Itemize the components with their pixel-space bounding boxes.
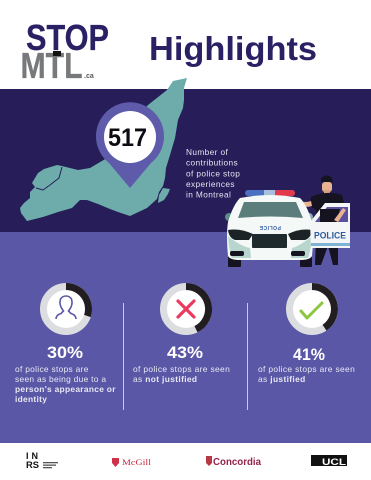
chart: donut 30% — [44, 286, 89, 332]
illustration: open police door — [310, 203, 350, 248]
title: Highlights — [149, 30, 317, 67]
illustration: open police door: POLICE — [314, 230, 346, 242]
icon: red cross — [178, 301, 194, 317]
map: island of Montreal — [20, 78, 187, 221]
logo: INRS: IN — [26, 451, 38, 461]
text: number of contributions: contributions — [186, 158, 238, 168]
statistic: 41%: 41% — [293, 345, 325, 364]
illustration: police car — [225, 190, 313, 267]
icon: location pin with count: 517 — [108, 124, 147, 152]
text: 43% description — [133, 364, 230, 384]
text: number of contributions: experiences — [186, 179, 235, 189]
text: 41% description: of police stops are seen — [258, 364, 355, 374]
text: number of contributions: of police stop — [186, 168, 240, 178]
statistic: 43%: 43% — [167, 343, 203, 362]
text: 30% description: of police stops are — [15, 364, 89, 374]
logo: UCL: UCL — [322, 457, 346, 468]
logo: UCL — [311, 455, 347, 468]
icon: person — [56, 296, 76, 319]
logo: Stop MTL: MTL — [20, 45, 82, 86]
logo: INRS: RS — [26, 460, 39, 470]
logo: McGill — [112, 457, 152, 467]
logo: Stop MTL: .ca — [84, 73, 94, 80]
panel: dark map band — [0, 89, 371, 232]
chart: donut 43% — [164, 286, 209, 332]
text: number of contributions — [186, 147, 240, 200]
text: 41% description — [258, 364, 355, 384]
icon: location pin with count — [96, 102, 164, 188]
illustration: police officer — [291, 176, 345, 265]
text: 30% description: identity — [15, 394, 47, 404]
map detail: small island — [158, 188, 170, 203]
logo: Stop MTL — [20, 17, 109, 86]
chart: donut 41% — [290, 286, 334, 332]
text: number of contributions: Number of — [186, 147, 228, 157]
statistic: 30%: 30% — [47, 343, 83, 362]
text: number of contributions: in Montreal — [186, 190, 231, 200]
map detail: river lines — [36, 167, 62, 190]
logo: Stop MTL: STOP — [26, 17, 109, 58]
text: 30% description — [15, 364, 116, 404]
text: 43% description: as not justified — [133, 374, 197, 384]
logo: McGill: McGill — [122, 457, 152, 467]
panel: purple statistics band — [0, 232, 371, 443]
text: 30% description: seen as being due to a — [15, 374, 106, 384]
illustration: police car: POLICE — [259, 224, 281, 230]
logo: INRS — [26, 451, 58, 470]
logo: Concordia: Concordia — [213, 457, 261, 468]
text: 30% description: person's appearance or — [15, 384, 116, 394]
text: 41% description: as justified — [258, 374, 306, 384]
text: 43% description: of police stops are seen — [133, 364, 230, 374]
icon: green check — [301, 303, 322, 318]
